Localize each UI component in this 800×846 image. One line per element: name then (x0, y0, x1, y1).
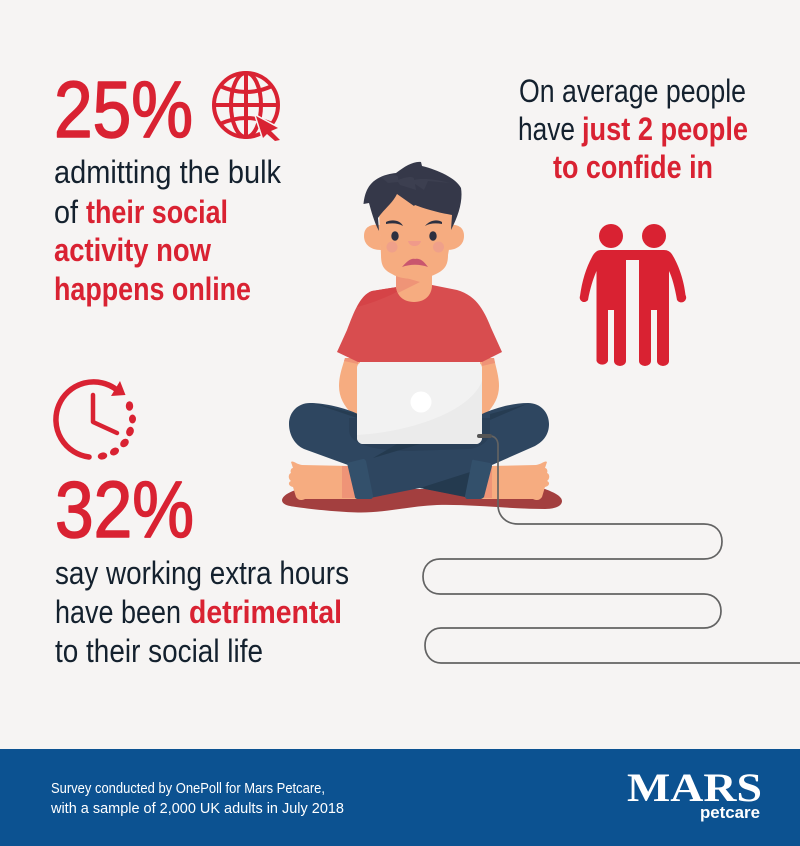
icon: two people (580, 224, 686, 366)
ears (364, 225, 381, 250)
cable (423, 436, 800, 663)
text: online social activity: their social (86, 194, 228, 230)
text: confide: have (518, 111, 575, 147)
text: online social activity: admitting the bulk (54, 154, 282, 190)
text: working extra hours (55, 555, 349, 669)
laptop (357, 362, 482, 444)
text: working extra hours: say working extra hours (55, 555, 349, 591)
footer note: Survey conducted by OnePoll for Mars Petcare, (51, 781, 325, 797)
neck (396, 265, 432, 302)
logo: Mars Petcare (627, 765, 762, 822)
icon: clock with arrow (56, 381, 136, 460)
text: online social activity: activity now (54, 232, 211, 268)
text: online social activity: of (54, 194, 78, 230)
mouth (402, 259, 428, 267)
text: working extra hours: have been (55, 594, 181, 630)
legs (289, 403, 549, 498)
feet (289, 461, 549, 500)
text: confide: just 2 people (581, 111, 748, 147)
nose (408, 241, 421, 246)
text: confide (518, 73, 748, 185)
stat: 32 percent: 32% (55, 465, 194, 554)
footer note: with a sample of 2,000 UK adults in July 2018 (50, 801, 344, 817)
hair (364, 162, 462, 231)
text: online social activity (54, 154, 282, 307)
text: working extra hours: to their social life (55, 633, 263, 669)
logo: Mars Petcare: petcare (700, 803, 760, 822)
footer note (50, 781, 344, 817)
logo: Mars Petcare: MARS (627, 765, 762, 810)
arms (339, 358, 360, 414)
eyes (391, 231, 399, 241)
illustration: person with laptop (282, 162, 562, 513)
text: confide: to confide in (553, 149, 713, 185)
mat (282, 489, 562, 513)
face (378, 190, 452, 279)
text: confide: On average people (519, 73, 746, 109)
text: online social activity: happens online (54, 271, 251, 307)
icon: globe with cursor (214, 73, 280, 141)
cuffs (347, 459, 373, 499)
shirt (337, 285, 502, 362)
eyebrows (386, 220, 403, 226)
text: working extra hours: detrimental (189, 594, 342, 630)
footer band (0, 749, 800, 846)
stat: 25 percent: 25% (54, 65, 193, 154)
